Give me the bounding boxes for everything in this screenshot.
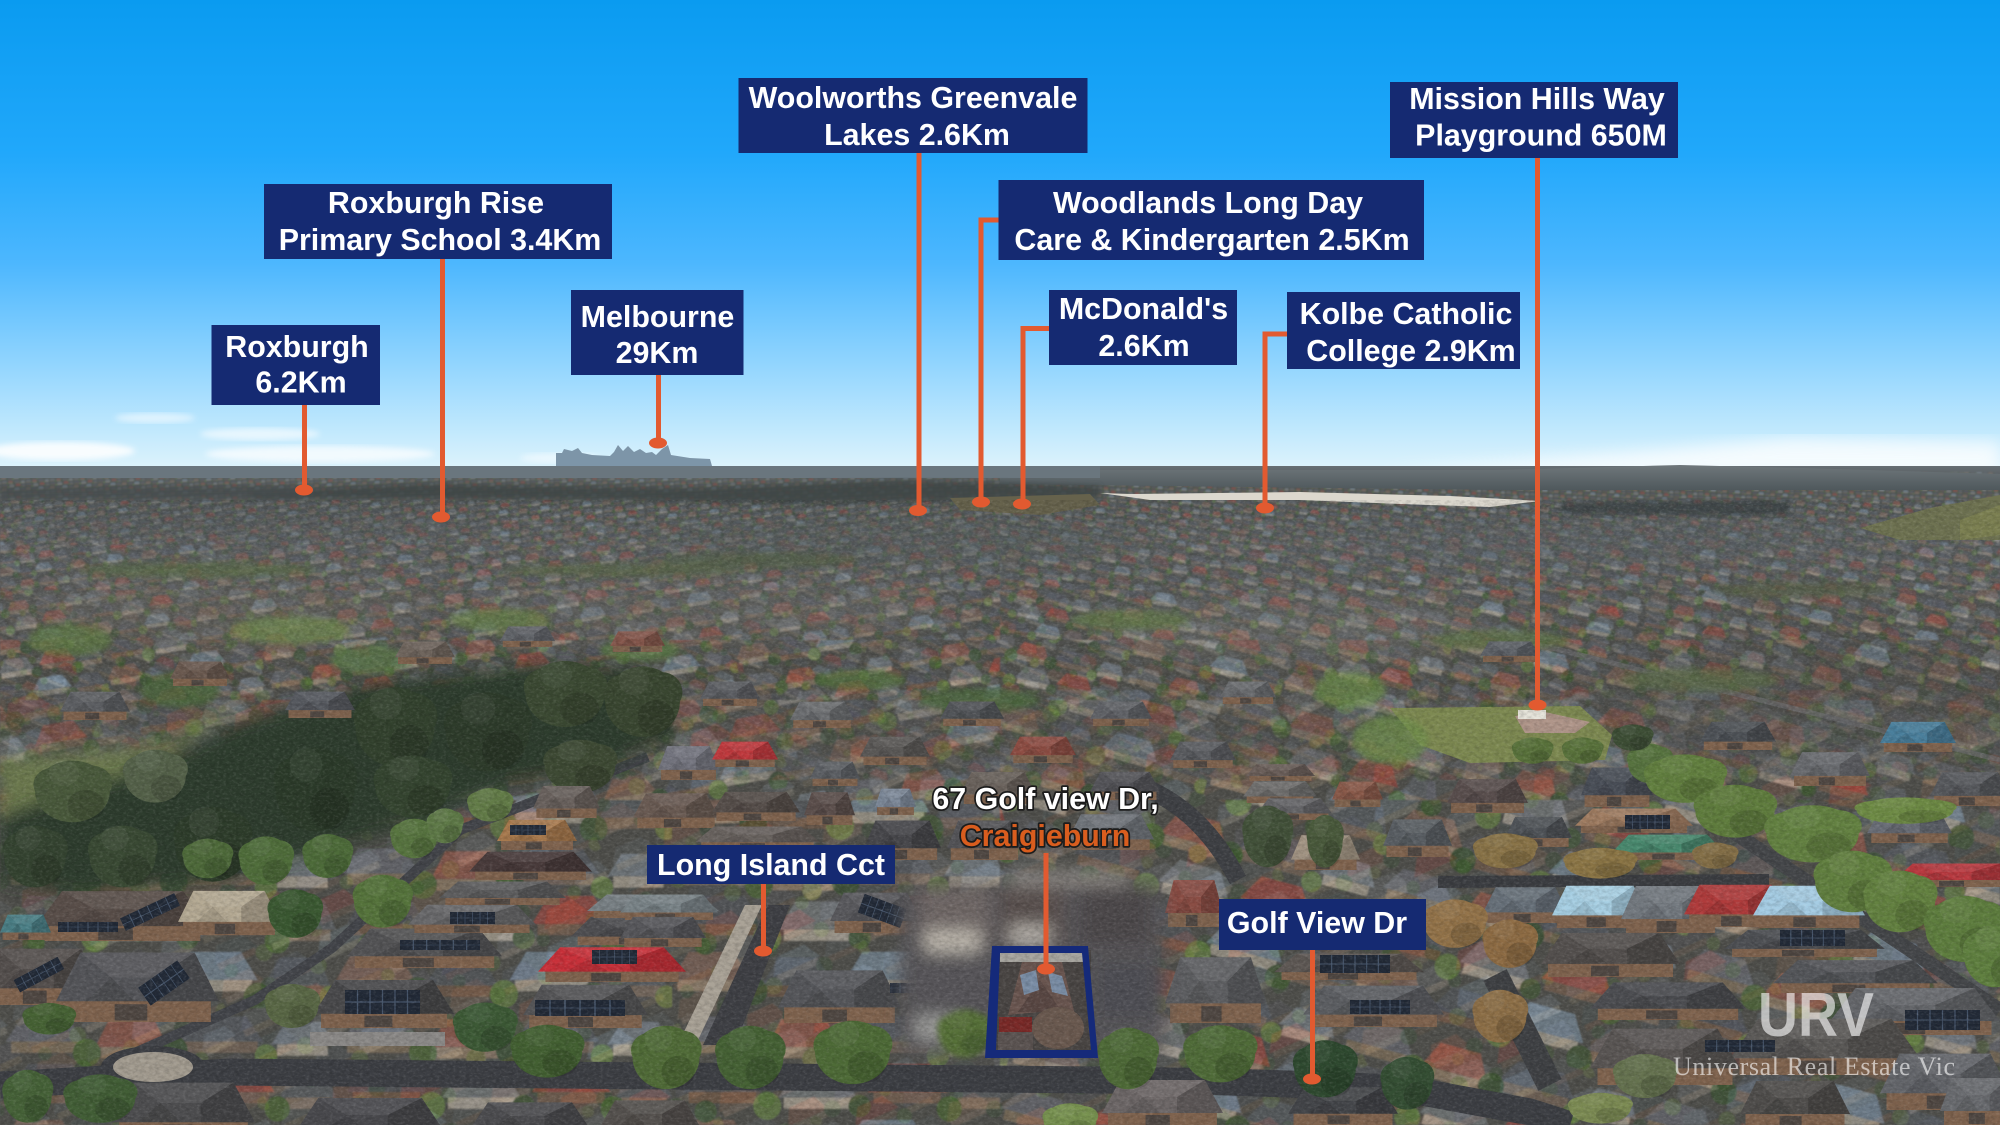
callout: Roxburgh Rise Primary School 3.4Km: Primary School 3.4Km bbox=[279, 223, 601, 257]
tree-lined walkway on the right bbox=[1644, 754, 2000, 987]
callout: McDonald's 2.6Km: 2.6Km bbox=[1098, 329, 1190, 363]
callout: Kolbe Catholic College 2.9Km: Kolbe Catholic bbox=[1300, 297, 1512, 331]
callout: Long Island Cct bbox=[647, 845, 895, 956]
callout: McDonald's 2.6Km bbox=[1013, 290, 1237, 510]
callout: Golf View Dr bbox=[1219, 899, 1426, 1084]
street trees along Golf View Dr bbox=[2, 724, 1739, 1125]
callout: Melbourne 29Km: 29Km bbox=[616, 336, 698, 370]
callout: subject property outline bbox=[985, 946, 1098, 1058]
callout: Roxburgh 6.2Km: Roxburgh bbox=[225, 330, 369, 364]
callout: Roxburgh Rise Primary School 3.4Km bbox=[264, 184, 612, 522]
watermark logo: Universal Real Estate Vic: URV bbox=[1758, 981, 1874, 1050]
callout: Woodlands Long Day Care & Kindergarten 2.5Km bbox=[972, 180, 1424, 508]
callout: Mission Hills Way Playground 650M bbox=[1390, 82, 1678, 710]
distant hill and lake bbox=[0, 465, 2000, 540]
tonal variation across the suburb bbox=[0, 504, 2000, 750]
aerial photo: suburb ground bbox=[0, 465, 2000, 1125]
blurred neighbouring houses bbox=[900, 870, 1165, 1055]
callout: Golf View Dr: Golf View Dr bbox=[1227, 906, 1407, 940]
callout: Roxburgh 6.2Km: 6.2Km bbox=[255, 366, 347, 400]
callout: property address bbox=[932, 782, 1159, 974]
callout: Melbourne 29Km bbox=[571, 290, 744, 448]
callout: Kolbe Catholic College 2.9Km bbox=[1256, 292, 1520, 514]
callout: Woodlands Long Day Care & Kindergarten 2.5Km: Care & Kindergarten 2.5Km bbox=[1014, 223, 1410, 257]
callout: property address: 67 Golf view Dr, bbox=[932, 782, 1159, 816]
icon: Melbourne city skyline bbox=[556, 445, 712, 466]
callout: Melbourne 29Km: Melbourne bbox=[581, 300, 734, 334]
light speckle texture over the photo bbox=[0, 500, 2000, 1125]
callout: Roxburgh 6.2Km bbox=[212, 325, 380, 496]
speckle texture over the photo bbox=[0, 500, 2000, 1125]
callout: Woolworths Greenvale Lakes 2.6Km: Woolworths Greenvale bbox=[749, 81, 1077, 115]
callout: Mission Hills Way Playground 650M: Playground 650M bbox=[1415, 118, 1667, 152]
callout: Kolbe Catholic College 2.9Km: College 2.9Km bbox=[1306, 334, 1516, 368]
foreground houses, left block bbox=[0, 742, 1154, 1125]
foreground houses, right block bbox=[1102, 764, 2000, 1125]
sky background bbox=[0, 0, 2000, 480]
callout: Mission Hills Way Playground 650M: Mission Hills Way bbox=[1409, 82, 1665, 116]
callout: Woolworths Greenvale Lakes 2.6Km bbox=[738, 78, 1088, 516]
callout: Woodlands Long Day Care & Kindergarten 2.5Km: Woodlands Long Day bbox=[1053, 186, 1363, 220]
watermark logo: Universal Real Estate Vic: Universal Real Estate Vic bbox=[1673, 1052, 1955, 1081]
roads bbox=[0, 600, 2000, 1125]
callout: McDonald's 2.6Km: McDonald's bbox=[1059, 292, 1228, 326]
scattered street trees mid-distance bbox=[28, 552, 1890, 764]
suburb roof texture bands bbox=[0, 472, 2000, 1125]
mid-distance houses breaking up the texture bbox=[60, 626, 2000, 806]
subject house at 67 Golf View Dr bbox=[996, 950, 1091, 1052]
green park areas bbox=[0, 505, 2000, 825]
callout: Woolworths Greenvale Lakes 2.6Km: Lakes 2.6Km bbox=[824, 118, 1010, 152]
callout: Roxburgh Rise Primary School 3.4Km: Roxburgh Rise bbox=[328, 186, 544, 220]
watermark logo: Universal Real Estate Vic bbox=[1673, 981, 1955, 1081]
callout: property address: Craigieburn bbox=[960, 819, 1130, 853]
callout: Long Island Cct: Long Island Cct bbox=[657, 848, 885, 882]
clouds on the horizon bbox=[0, 413, 2000, 476]
distant hazy band bbox=[0, 466, 2000, 676]
dark forest beside the golf course bbox=[0, 661, 682, 928]
